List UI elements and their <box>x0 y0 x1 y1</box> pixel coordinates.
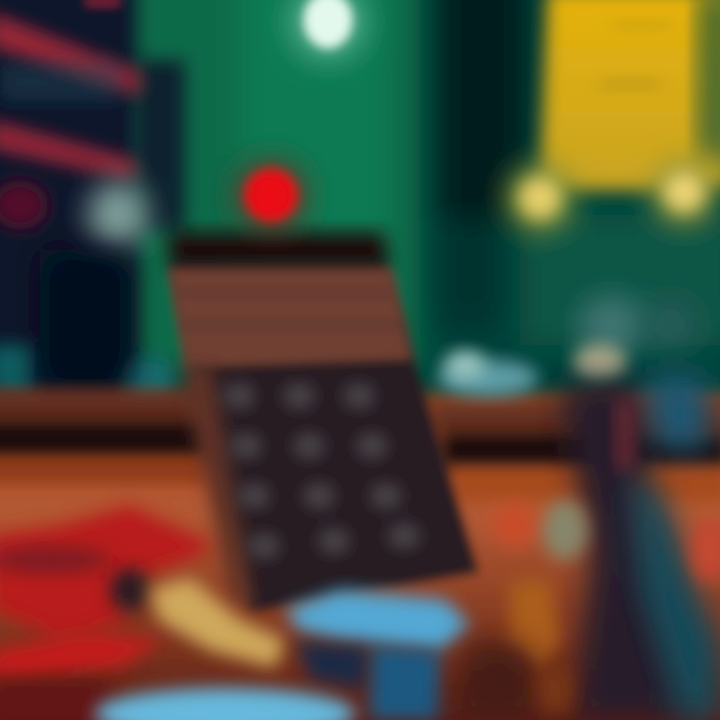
blue object <box>285 590 470 720</box>
red objects on lower left <box>0 505 215 720</box>
blue shape at bottom <box>95 688 355 720</box>
calculator body <box>170 262 478 612</box>
dark vertical band <box>440 0 525 330</box>
yellow notice panel <box>540 0 720 190</box>
background wall: green <box>0 0 720 440</box>
calculator display section <box>168 268 412 368</box>
icon: right yellow lamp <box>652 160 716 224</box>
icon: ceiling light <box>288 0 368 62</box>
calculator left side <box>180 365 255 610</box>
objects behind calculator on right: teal and white <box>438 351 538 396</box>
calculator <box>168 232 478 612</box>
calculator top edge <box>168 232 390 268</box>
icon: left yellow lamp <box>506 164 574 232</box>
figurine on right <box>560 295 720 720</box>
display stripes <box>178 290 404 329</box>
yellow object <box>150 578 285 668</box>
table edge and surface <box>0 392 720 720</box>
calculator keys grid <box>225 385 418 557</box>
icon: red button <box>237 162 305 230</box>
left shelves: dark panel with red stripes <box>0 0 185 420</box>
small objects at lower right <box>450 500 720 720</box>
